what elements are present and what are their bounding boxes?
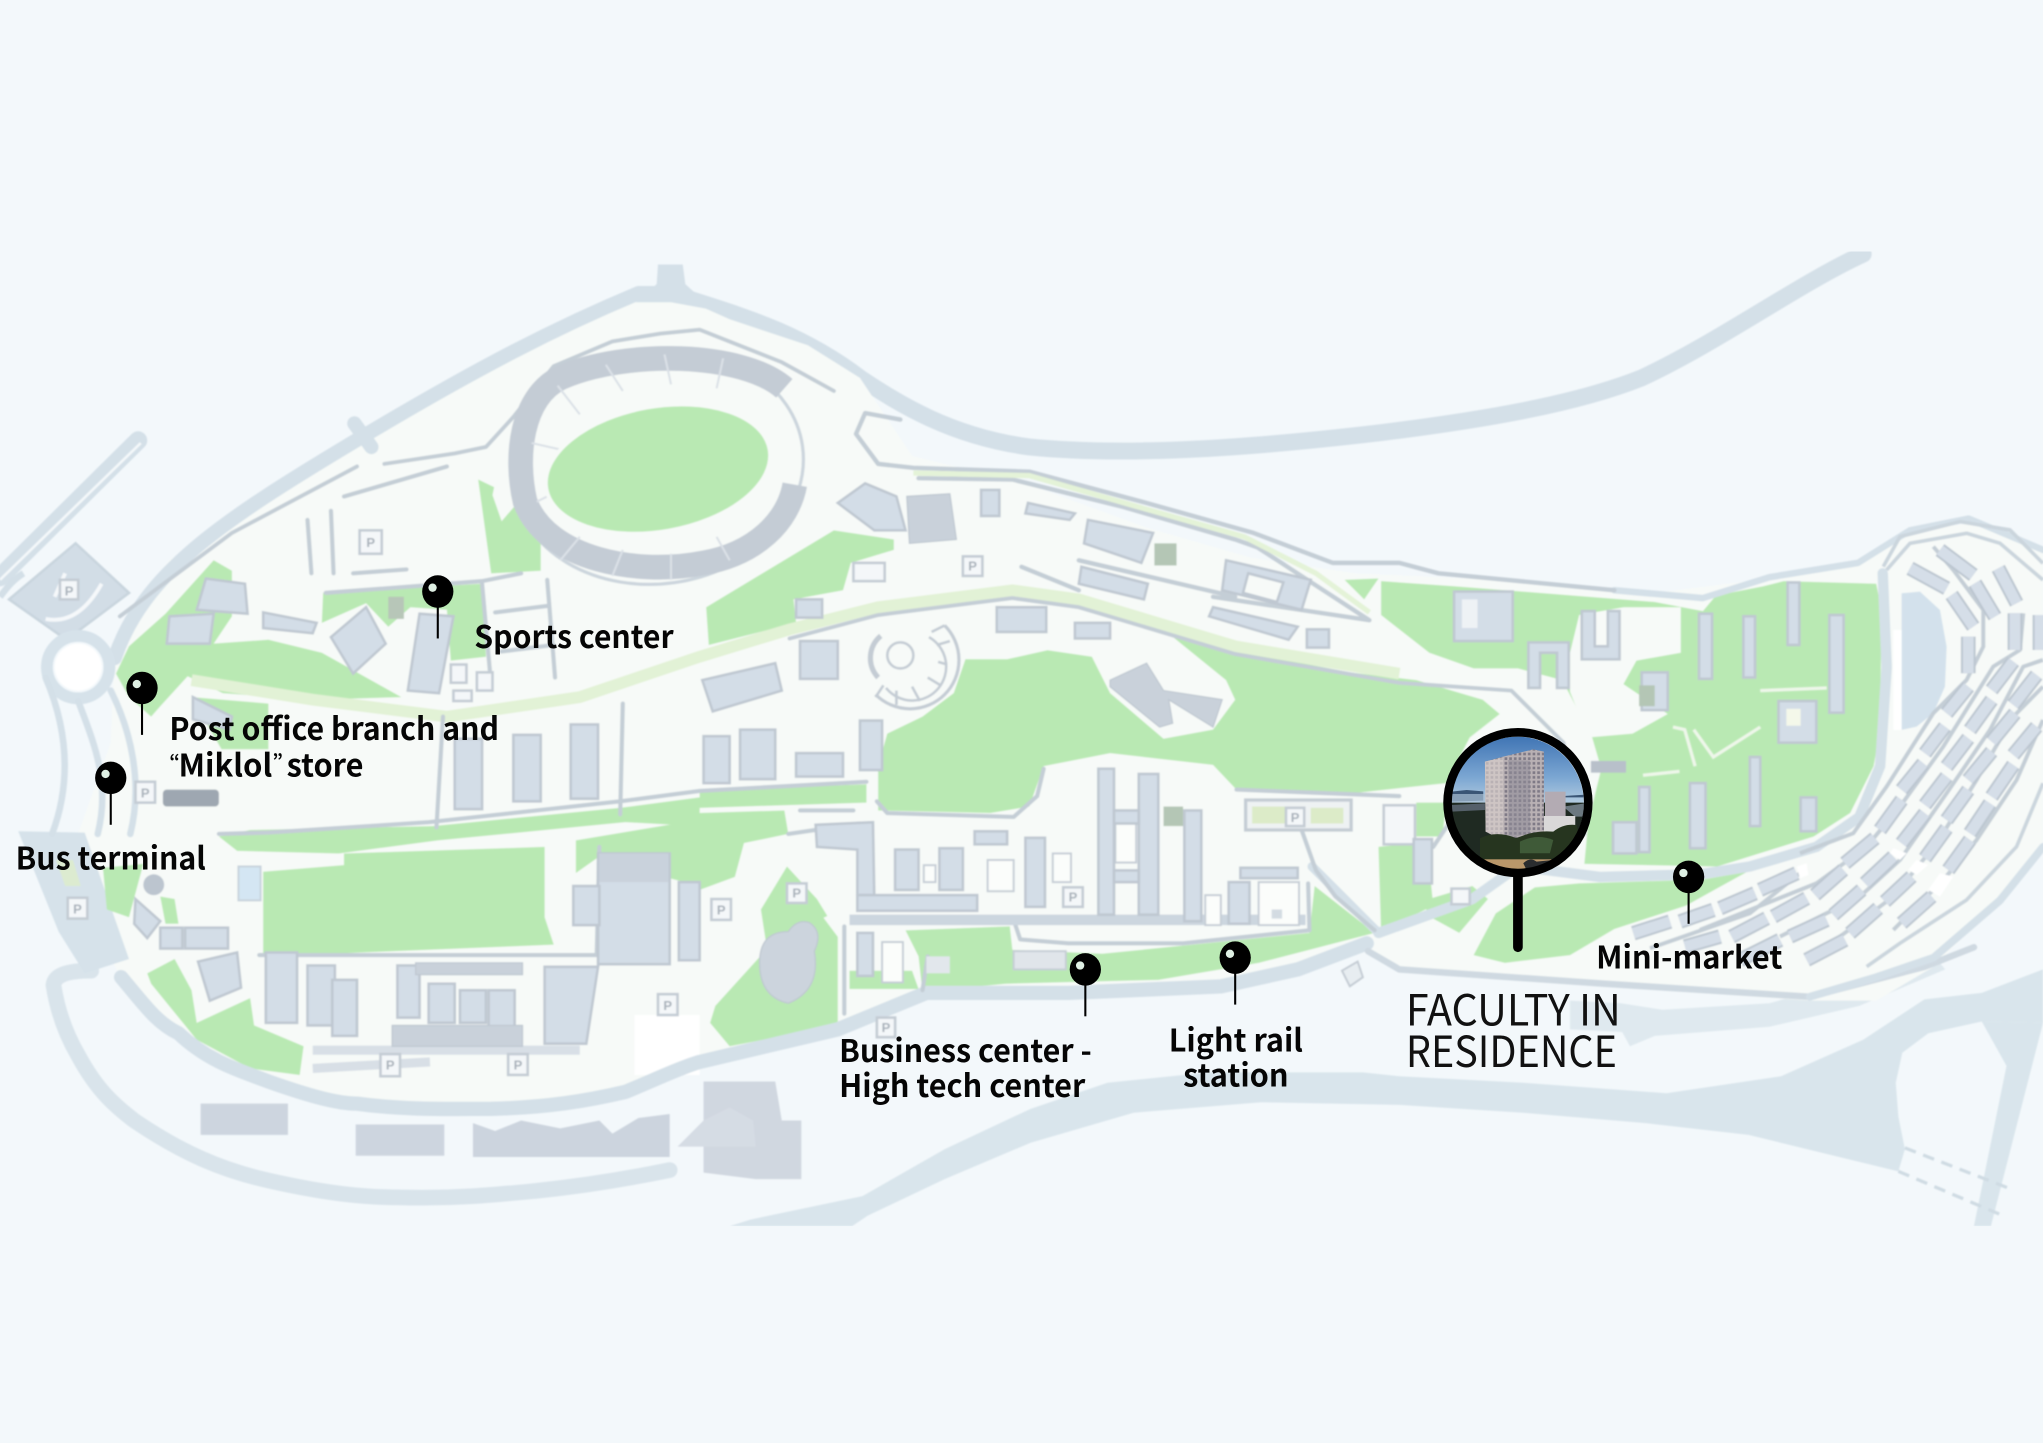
green areas — [103, 480, 1881, 1075]
heading: faculty in residence: FACULTY IN — [1406, 976, 1621, 1038]
label: business center: High tech center — [839, 1062, 1086, 1107]
label: mini-market: Mini-market — [1596, 934, 1782, 979]
parking markers: P — [514, 1058, 523, 1073]
main road — [115, 293, 671, 658]
green: round building plot — [710, 866, 838, 1046]
dorm buildings outline — [1633, 550, 2040, 960]
parking markers: P — [717, 903, 726, 918]
buildings centre — [702, 483, 1415, 1003]
northern boundary road — [1614, 519, 2043, 598]
stadium — [497, 330, 819, 603]
west access roads — [46, 678, 136, 834]
eastern ring road — [1379, 573, 1887, 933]
campus map infographic — [0, 252, 2043, 1226]
label: post office and store — [169, 705, 499, 787]
label: post office and store: store — [287, 742, 364, 787]
south west road — [53, 971, 670, 1198]
west forecourt — [18, 831, 129, 973]
green: south west — [103, 864, 304, 1075]
campus map — [0, 254, 2043, 1226]
buildings east — [1414, 582, 1844, 904]
dorm lake — [1902, 592, 1947, 730]
parking markers: P — [386, 1058, 395, 1073]
label: post office and store: Post office branch and — [169, 705, 499, 750]
pin: post office — [126, 672, 158, 735]
west parking lot — [9, 543, 129, 640]
green: west strip — [219, 784, 866, 890]
label: business center: Business center - — [839, 1027, 1092, 1072]
north west junction — [354, 423, 371, 447]
parking markers: P — [882, 1020, 891, 1035]
parking markers: P — [968, 559, 977, 574]
outer lake band — [730, 969, 2043, 1226]
pin: light rail station — [1220, 941, 1251, 1005]
building photo — [1450, 736, 1585, 873]
parking markers: P — [65, 583, 74, 598]
green: north west belt — [116, 560, 401, 717]
north east highway — [671, 254, 1863, 451]
dashed crossings — [1898, 1148, 2009, 1214]
parking markers — [60, 530, 1304, 1076]
label: post office and store: “ — [169, 747, 180, 773]
inner roads — [219, 466, 1459, 1014]
dorm perimeter roads — [1867, 522, 2043, 967]
upper south band — [1570, 964, 1944, 1046]
north green path — [913, 473, 1369, 612]
label: post office and store: ” — [272, 747, 283, 773]
campus ground — [674, 302, 1932, 1001]
white patches — [1570, 607, 1681, 737]
parking markers: P — [141, 785, 150, 800]
parking markers: P — [792, 886, 801, 901]
green: near residence — [1379, 803, 1488, 933]
north loop road — [856, 413, 1614, 620]
heading: faculty in residence: RESIDENCE — [1406, 1018, 1617, 1080]
central towers — [1115, 810, 1136, 863]
label: light rail station: Light rail — [1169, 1016, 1303, 1061]
parallel inner road — [120, 330, 834, 616]
north west highway — [0, 440, 138, 577]
green: north east triangle — [1345, 579, 1379, 599]
green: stadium side — [478, 480, 541, 573]
label: bus terminal: Bus terminal — [16, 835, 206, 880]
parking markers: P — [663, 998, 672, 1013]
parking markers: P — [1069, 890, 1078, 905]
marker stem — [1514, 873, 1522, 947]
buildings west — [134, 579, 801, 1179]
pin: sports center — [422, 575, 453, 638]
label: post office and store: Miklol — [179, 742, 272, 787]
green: south of residence — [1474, 872, 1747, 963]
green: south strip — [906, 886, 1375, 992]
green: parking edge — [850, 971, 919, 989]
outer pale road — [1810, 847, 2043, 997]
green: north wedge — [706, 530, 894, 645]
southern ring road — [121, 943, 1367, 1109]
pale green promenade — [192, 590, 1399, 717]
green: sports lawn — [322, 584, 486, 661]
top junction — [636, 264, 704, 308]
yellow plots — [1246, 800, 1351, 830]
green: by post office — [192, 697, 268, 749]
marker ring — [1448, 732, 1588, 873]
white plots — [1797, 848, 1953, 897]
label: sports center: Sports center — [474, 613, 674, 658]
roundabout — [47, 636, 109, 698]
green: west lawn — [263, 847, 554, 956]
road junction — [1312, 866, 1379, 933]
lower ring road — [1368, 947, 1974, 997]
parking markers: P — [1291, 810, 1300, 825]
centre service road — [850, 916, 1306, 924]
promenade edge — [790, 598, 1584, 834]
green: central park — [878, 629, 1500, 813]
round building — [760, 922, 818, 1003]
lake white strip — [1893, 630, 1902, 730]
pin: bus terminal — [95, 762, 126, 825]
south east road — [1974, 1022, 2043, 1226]
dorm neighbourhood — [1633, 522, 2043, 967]
amphitheatre — [870, 625, 959, 709]
green: east campus — [1381, 581, 1881, 866]
pin: business center — [1070, 953, 1101, 1016]
parking markers: P — [73, 901, 82, 916]
parking markers: P — [366, 535, 375, 550]
callout: faculty in residence photo marker — [1448, 732, 1588, 947]
label: light rail station: station — [1183, 1052, 1289, 1097]
dorm streets — [1650, 547, 2043, 948]
dorm buildings fill — [1633, 550, 2040, 960]
lower street — [313, 1050, 580, 1068]
pin: mini-market — [1673, 861, 1704, 924]
